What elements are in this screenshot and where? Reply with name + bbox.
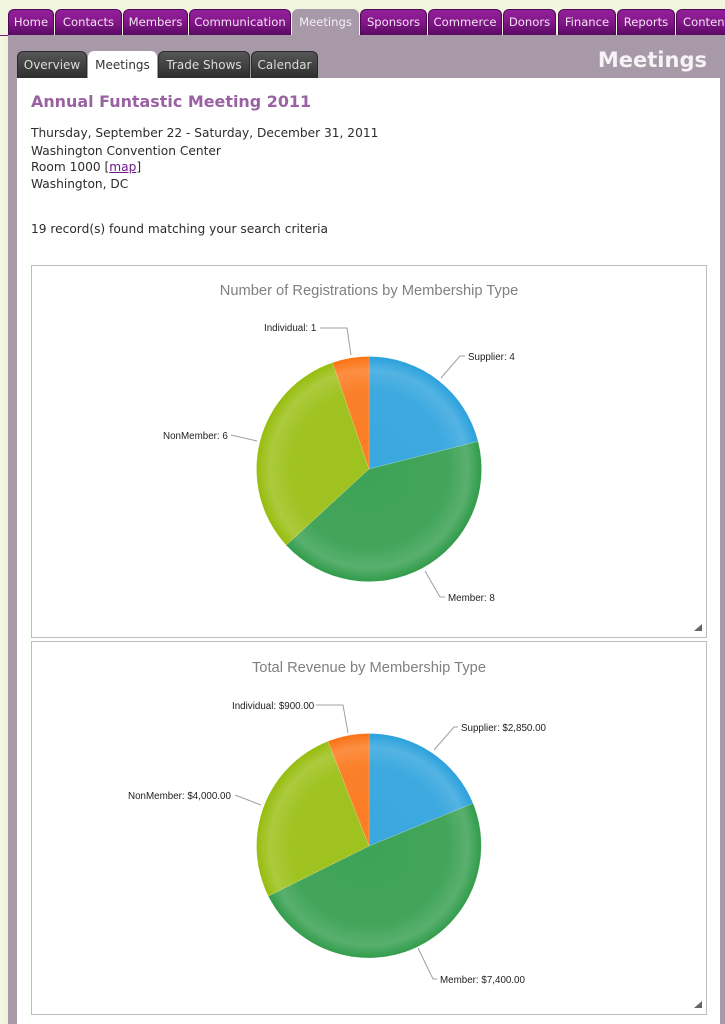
slice: member	[268, 803, 481, 958]
slice: nonmember	[257, 741, 369, 896]
main navigation tabs: Sponsors	[367, 15, 420, 29]
label: nonmember: NonMember: 6	[163, 431, 228, 442]
meeting details: Washington, DC	[31, 177, 128, 191]
section sub-tabs: Overview	[24, 58, 80, 72]
slice: nonmember	[256, 363, 369, 545]
main navigation tabs: Communication	[194, 15, 286, 29]
label: individual	[264, 323, 351, 355]
meeting details	[30, 126, 378, 191]
main navigation tabs: Meetings	[299, 15, 352, 29]
slice: member	[286, 441, 482, 582]
main navigation tabs: Members	[129, 15, 182, 29]
label: member: Member: $7,400.00	[440, 975, 526, 986]
label: individual: Individual: $900.00	[232, 701, 315, 712]
slice: individual	[332, 356, 369, 469]
chart panel: registrations by membership type	[31, 265, 707, 638]
search result count: 19 record(s) found matching your search criteria	[31, 222, 328, 236]
label: member	[425, 571, 495, 604]
label: supplier	[434, 723, 547, 750]
main navigation tabs: Home	[14, 15, 48, 29]
label: member	[418, 948, 526, 986]
main navigation tabs: Commerce	[434, 15, 496, 29]
label: individual	[232, 701, 348, 733]
resize handle	[694, 1001, 702, 1008]
section heading: Meetings	[598, 48, 707, 72]
label: nonmember	[163, 431, 257, 442]
main navigation tabs: Contacts	[63, 15, 114, 29]
pie chart: registrations	[163, 283, 702, 631]
label: member: Member: 8	[448, 593, 495, 604]
section sub-tabs: Calendar	[258, 58, 311, 72]
main navigation tabs: Reports	[624, 15, 668, 29]
main navigation tabs	[8, 9, 725, 35]
chart title: Number of Registrations by Membership Type	[220, 283, 518, 299]
section sub-tabs: Trade Shows	[166, 58, 242, 72]
chart title: Total Revenue by Membership Type	[252, 660, 486, 676]
label: nonmember: NonMember: $4,000.00	[128, 791, 231, 802]
main navigation tabs: Donors	[509, 15, 550, 29]
meeting details: Washington Convention Center	[31, 144, 221, 158]
label: supplier: Supplier: $2,850.00	[461, 723, 547, 734]
chart panel: revenue by membership type	[31, 641, 707, 1015]
resize handle	[694, 624, 702, 631]
slice: supplier	[369, 356, 478, 469]
main navigation tabs: Finance	[565, 15, 609, 29]
header rule	[0, 35, 8, 36]
slice: supplier	[369, 734, 473, 846]
page side shading	[0, 36, 8, 1024]
section sub-tabs	[17, 51, 318, 78]
meeting details: Thursday, September 22 - Saturday, December 31, 2011	[31, 126, 378, 140]
label: individual: Individual: 1	[264, 323, 316, 334]
label: nonmember	[128, 791, 261, 805]
section sub-tabs: Meetings	[95, 58, 150, 72]
pie chart: revenue	[128, 660, 702, 1008]
label: supplier	[441, 352, 515, 378]
meeting details: Room 1000 [map]	[31, 160, 141, 174]
label: supplier: Supplier: 4	[468, 352, 515, 363]
meeting title: Annual Funtastic Meeting 2011	[31, 92, 311, 111]
slice: individual	[328, 734, 369, 846]
